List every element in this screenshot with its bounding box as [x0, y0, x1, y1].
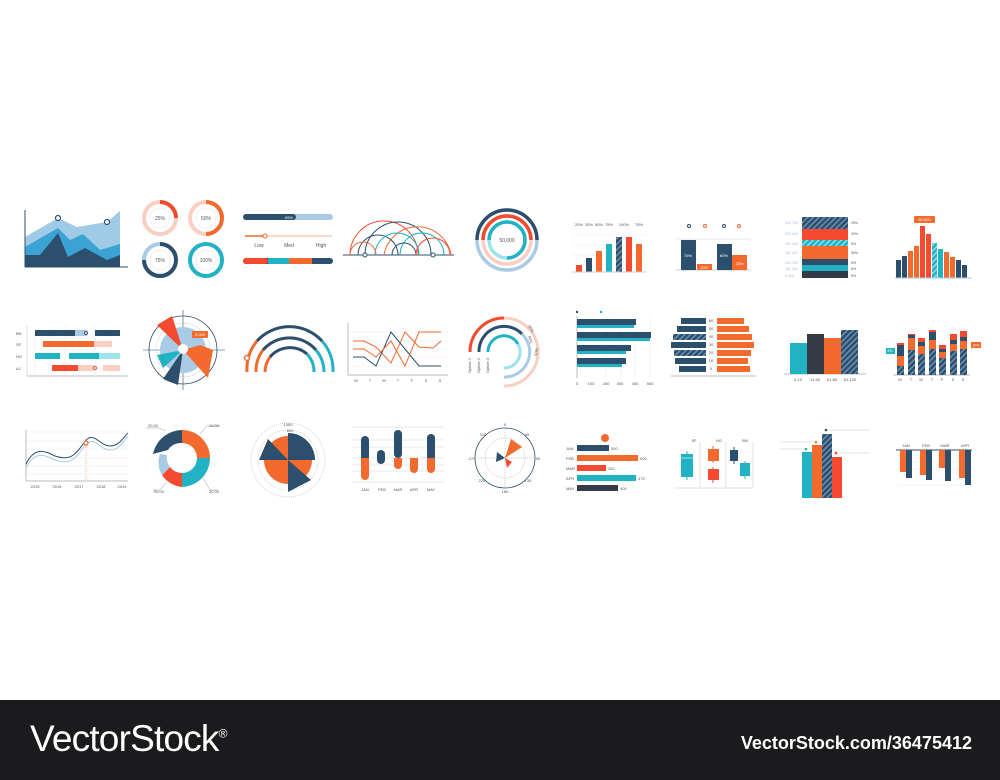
chart: negative bars by month — [896, 443, 972, 485]
chart: radial progress options — [467, 318, 539, 386]
chart: stacked bars weekly: 8% — [887, 349, 893, 353]
chart: radial progress options: 60% — [527, 324, 536, 334]
chart: horizontal grouped bars: 0 — [576, 381, 579, 386]
chart: multi line chart: S — [439, 378, 442, 383]
chart: percent bar chart: 75% — [605, 222, 613, 227]
chart: population pyramid: 60 — [709, 318, 714, 323]
chart: concentric ring 50,000: 50,000 — [499, 238, 515, 244]
chart: multi line chart: S — [425, 378, 428, 383]
chart: radial nightingale — [143, 310, 225, 390]
chart: four bars: 0-10 — [794, 377, 803, 382]
chart: compass polar — [469, 422, 541, 494]
chart: paired bars with pins — [676, 224, 751, 270]
chart: four bars: 51-80 — [827, 377, 838, 382]
chart: box plots: HG — [716, 438, 722, 443]
chart: progress bars — [243, 214, 333, 264]
chart: paired bars with pins: 10% — [700, 265, 708, 270]
chart: radial progress options: Option 3 — [485, 357, 490, 373]
chart: gantt: BN — [16, 331, 22, 336]
chart: horizontal grouped bars: 100 — [588, 381, 595, 386]
chart: monthly horizontal bars: 250 — [608, 466, 615, 471]
chart: horizontal grouped bars: 300 — [617, 381, 624, 386]
footer bar — [0, 700, 1000, 780]
chart: segmented donut: 10.00 — [209, 423, 220, 428]
chart: horizontal grouped bars: 200 — [603, 381, 610, 386]
chart: box plots: BN — [742, 438, 748, 443]
chart: compass polar: 45 — [525, 432, 530, 437]
chart: stacked single column: 20% — [851, 232, 858, 236]
chart: paired bars with pins: 35% — [736, 261, 744, 266]
chart: percent bar chart: 50% — [595, 222, 603, 227]
chart: four donuts: 25% — [155, 216, 166, 222]
chart: polar area chart: 800 — [287, 428, 294, 433]
chart: monthly horizontal bars: 500 — [640, 456, 647, 461]
chart: diverging vertical bars: JAN — [361, 487, 369, 492]
chart: multi line chart: M — [354, 378, 358, 383]
chart: radial progress options: 50% — [533, 347, 539, 356]
chart: stacked bars weekly: F — [941, 377, 944, 382]
chart: population pyramid: 40 — [709, 334, 714, 339]
chart: stacked single column: 501-600 — [785, 232, 798, 236]
chart: stacked bars weekly: M — [898, 377, 902, 382]
chart: smooth curves: 2015 — [31, 484, 40, 489]
chart: compass polar: 270 — [469, 456, 476, 461]
chart: multi line chart: T — [369, 378, 372, 383]
chart: percent bar chart: 20% — [575, 222, 583, 227]
chart: compass polar: 0 — [504, 422, 507, 427]
chart: four bars: 81-100 — [844, 377, 857, 382]
chart: histogram — [895, 216, 972, 278]
chart: highlighted column bars — [780, 429, 870, 498]
chart: horizontal grouped bars: 500 — [647, 381, 654, 386]
chart: smooth curves: 2016 — [53, 484, 62, 489]
chart: stacked bars weekly: S — [962, 377, 965, 382]
chart: stacked single column: 201-300 — [785, 261, 798, 265]
chart: progress bars: 65% — [285, 215, 293, 220]
chart: stacked bars weekly: 10% — [972, 344, 980, 348]
chart: segmented donut — [146, 423, 220, 494]
chart: segmented donut: 50.00 — [154, 489, 165, 494]
chart: stacked single column: 6% — [851, 267, 856, 271]
chart: negative bars by month: JAN — [902, 443, 910, 448]
chart: monthly horizontal bars: 300 — [611, 446, 618, 451]
chart: stacked bars weekly — [886, 330, 981, 382]
chart: gantt: AJ — [16, 366, 21, 371]
chart: population pyramid: 50 — [709, 326, 714, 331]
chart: monthly horizontal bars: APR — [566, 476, 574, 481]
chart: radial progress options: Option 2 — [476, 357, 481, 373]
chart: negative bars by month: APR — [961, 443, 969, 448]
chart: radial nightingale: 5,000 — [195, 332, 206, 337]
footer logo: VectorStock® — [30, 718, 227, 759]
chart: compass polar: 180 — [502, 489, 509, 494]
chart: percent bar chart: 35% — [585, 222, 593, 227]
chart: semicircle arcs — [244, 327, 333, 372]
chart: population pyramid: 0 — [710, 366, 713, 371]
chart: monthly horizontal bars: MAY — [566, 486, 575, 491]
chart: four bars: 11-50 — [810, 377, 821, 382]
chart: population pyramid — [671, 318, 756, 376]
chart: monthly horizontal bars — [566, 434, 647, 491]
chart: gantt: SF — [16, 342, 22, 347]
chart: multi line chart: W — [382, 378, 386, 383]
chart: compass polar: 135 — [525, 478, 532, 483]
chart: paired bars with pins: 60% — [720, 253, 728, 258]
chart: stacked single column: 25% — [851, 221, 858, 225]
chart: four donuts — [144, 202, 222, 276]
chart: population pyramid: 30 — [709, 342, 714, 347]
chart: population pyramid: 20 — [709, 350, 714, 355]
chart: stacked single column: 30% — [851, 251, 858, 255]
chart: stacked bars weekly: T — [931, 377, 934, 382]
chart: multi line chart: F — [411, 378, 414, 383]
chart: stacked single column: 6% — [851, 242, 856, 246]
chart: stacked single column — [785, 217, 858, 278]
chart: paired bars with pins: 75% — [684, 253, 692, 258]
chart: horizontal grouped bars: 400 — [632, 381, 639, 386]
chart: box plots — [675, 438, 753, 488]
chart: monthly horizontal bars: MAR — [566, 466, 575, 471]
footer url: VectorStock.com/36475412 — [741, 733, 972, 753]
chart: polar area chart — [251, 422, 325, 497]
chart: population pyramid: 10 — [709, 358, 714, 363]
chart: four bars — [784, 330, 866, 382]
chart: monthly horizontal bars: FEB — [566, 456, 574, 461]
chart: diverging vertical bars: MAY — [427, 487, 436, 492]
chart: gantt: HG — [16, 354, 22, 359]
chart: stacked bars weekly: W — [919, 377, 923, 382]
chart: multi line chart: T — [397, 378, 400, 383]
chart: compass polar: 90 — [536, 456, 541, 461]
chart: compass polar: 225 — [479, 478, 486, 483]
chart: negative bars by month: FEB — [922, 443, 930, 448]
chart: stacked single column: 401-500 — [785, 242, 798, 246]
chart: monthly horizontal bars: JAN — [566, 446, 574, 451]
chart: radial progress options: Option 1 — [467, 357, 472, 373]
chart: progress bars: High — [316, 243, 326, 249]
chart: stacked single column: 101-200 — [785, 267, 798, 271]
chart: smooth curves: 2018 — [97, 484, 106, 489]
chart: diverging vertical bars — [352, 427, 444, 492]
chart: progress bars: Low — [254, 243, 264, 249]
chart: radial progress options: 40% — [527, 335, 534, 344]
chart: four donuts: 75% — [155, 258, 166, 264]
chart: gantt — [16, 325, 128, 376]
chart: stacked bars weekly: S — [952, 377, 955, 382]
chart: concentric ring 50,000 — [477, 210, 537, 270]
chart: multi line chart — [348, 323, 448, 383]
chart: horizontal grouped bars — [576, 311, 654, 386]
chart: four donuts: 100% — [200, 258, 213, 264]
chart: monthly horizontal bars: 475 — [638, 476, 645, 481]
chart: stacked single column: 301-400 — [785, 251, 798, 255]
chart: histogram: 50,000 — [918, 217, 931, 222]
chart: percent bar chart: 100% — [619, 222, 630, 227]
chart: smooth curves — [26, 430, 128, 489]
chart: compass polar: 315 — [480, 432, 487, 437]
chart: smooth curves: 2019 — [118, 484, 127, 489]
chart: stacked bars weekly: T — [910, 377, 913, 382]
chart: stacked single column: 5% — [851, 261, 856, 265]
chart: diverging vertical bars: MAR — [394, 487, 403, 492]
chart: box plots: SF — [691, 438, 697, 443]
chart: percent bar chart — [572, 222, 646, 272]
chart: negative bars by month: MAR — [941, 443, 950, 448]
chart: percent bar chart: 75% — [635, 222, 643, 227]
chart: smooth curves: 2017 — [75, 484, 84, 489]
chart: stacked single column: 5% — [851, 274, 856, 278]
chart: diverging vertical bars: APR — [410, 487, 418, 492]
chart: stacked single column: 0-100 — [785, 274, 794, 278]
chart: segmented donut: 20.00 — [148, 423, 159, 428]
chart: segmented donut: 30.00 — [209, 489, 220, 494]
chart: area chart — [25, 210, 128, 267]
chart: diverging vertical bars: FEB — [378, 487, 386, 492]
chart: progress bars: Med — [284, 243, 294, 249]
chart: monthly horizontal bars: 400 — [620, 486, 627, 491]
chart: arc diagram — [343, 221, 454, 257]
chart: polar area chart: 1000 — [284, 422, 293, 427]
chart: stacked single column: 601-700 — [785, 221, 798, 225]
chart: four donuts: 50% — [201, 216, 212, 222]
